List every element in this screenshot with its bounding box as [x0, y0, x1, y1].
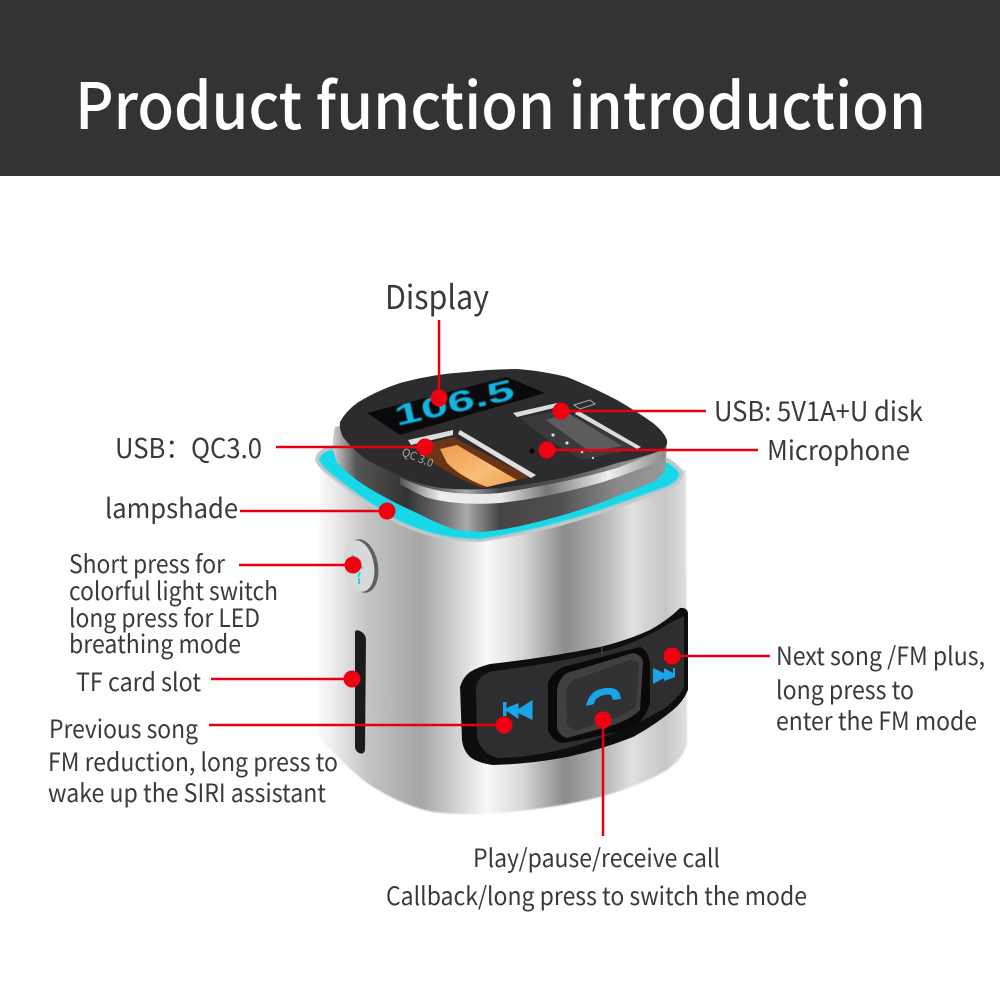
callout: next song: enter the FM mode [776, 702, 977, 738]
rim highlight band [400, 450, 665, 504]
callout: light switch: colorful light switch [69, 572, 278, 608]
light switch button [340, 537, 382, 595]
QC 3.0 print: QC 3.0 [400, 444, 436, 471]
callout: play/pause: Callback/long press to switch the mode [386, 877, 807, 913]
callout: USB 5V1A [552, 390, 923, 429]
callout: play/pause [386, 712, 807, 913]
callout: Microphone [538, 429, 910, 468]
display reading: 106.5 [391, 374, 517, 433]
USB QC3.0 port [408, 430, 536, 488]
callout: previous song [48, 710, 512, 810]
lampshade light ring [315, 430, 683, 542]
callout: light switch [69, 545, 362, 661]
callout: previous song: Previous song [49, 710, 198, 746]
callout: previous song: wake up the SIRI assistant [48, 774, 327, 810]
card icon [370, 685, 390, 719]
top face [340, 369, 667, 490]
callout: light switch: long press for LED [69, 599, 260, 635]
callout: lampshade: lampshade [105, 487, 238, 526]
TF card slot [355, 630, 366, 754]
callout: USB 5V1A: USB: 5V1A+U disk [714, 390, 923, 429]
play button surround [548, 647, 650, 743]
callout: lampshade [105, 487, 396, 526]
callout: next song: long press to [776, 671, 914, 707]
display screen [367, 377, 545, 435]
icon: phone [586, 688, 621, 706]
icon: USB symbol [574, 400, 595, 409]
charger body [318, 462, 687, 814]
play button [557, 653, 643, 738]
callout: light switch: Short press for [69, 545, 225, 581]
callout: previous song: FM reduction, long press to [48, 743, 338, 779]
callout: TF card slot [76, 663, 360, 699]
callout: TF card slot: TF card slot [76, 663, 202, 699]
icon: previous [503, 700, 532, 720]
icon: next [653, 668, 675, 684]
callout: next song [664, 637, 985, 738]
callout: USB QC3.0 [115, 427, 434, 466]
microphone hole [530, 448, 534, 454]
callout: Display [385, 271, 489, 406]
product illustration: car charger [315, 369, 688, 814]
callout: USB QC3.0: USB：QC3.0 [115, 427, 262, 466]
seam [601, 646, 603, 654]
callout: light switch: breathing mode [69, 625, 241, 661]
title: Product function introduction [75, 56, 926, 148]
metal rim [333, 385, 667, 532]
USB 5V1A port [513, 403, 641, 460]
control panel [460, 608, 688, 765]
header banner [0, 0, 1000, 176]
callout: next song: Next song /FM plus, [776, 637, 985, 673]
callout: Microphone: Microphone [767, 429, 910, 468]
callout: play/pause: Play/pause/receive call [473, 839, 720, 875]
callout: Display: Display [385, 271, 489, 319]
